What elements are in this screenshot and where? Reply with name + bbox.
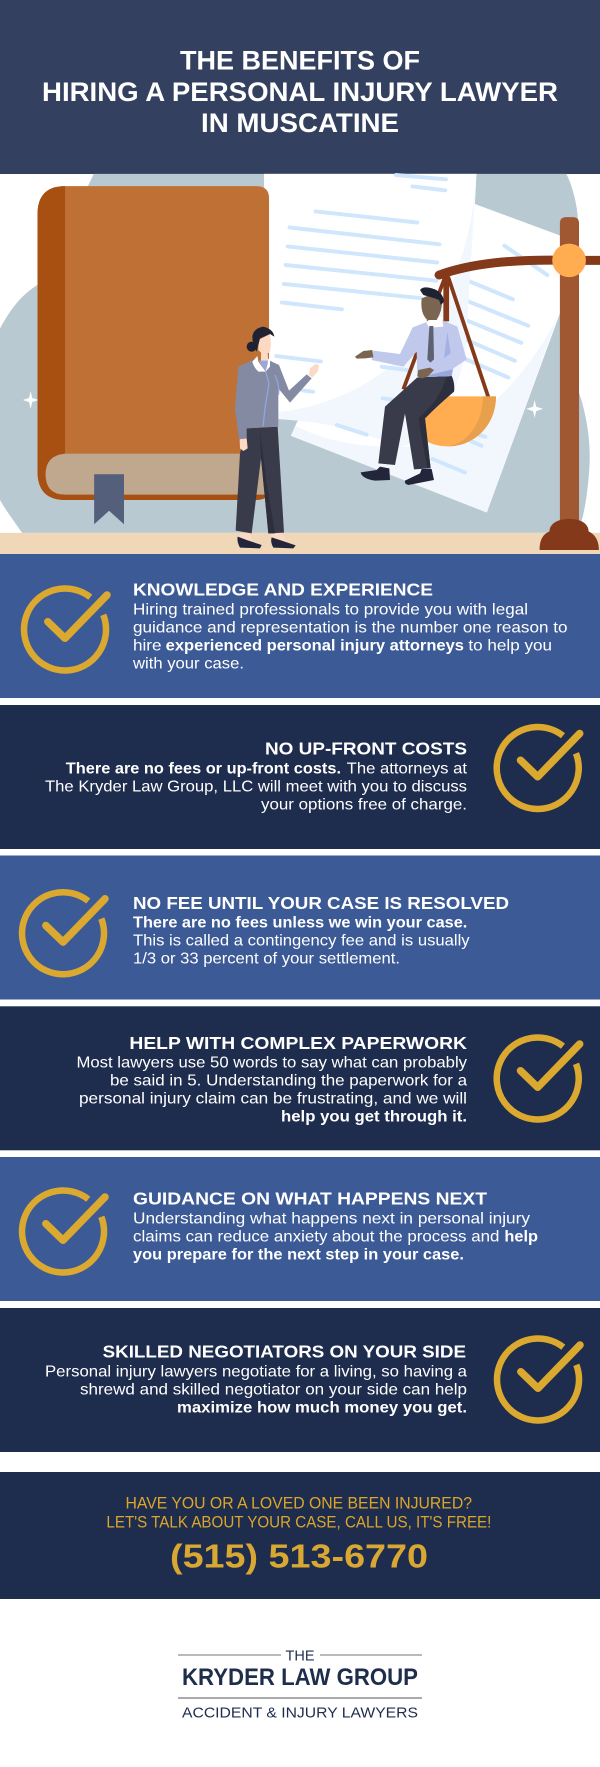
logo: The Kryder Law Group: KRYDER LAW GROUP [182, 1664, 418, 1691]
icon: gold check circle [497, 1338, 580, 1420]
icon: gold check circle [497, 727, 580, 809]
text block [76, 1054, 467, 1125]
text block: help you get through it. [281, 1108, 467, 1125]
text block: with your case. [132, 655, 244, 672]
logo: The Kryder Law Group: THE [286, 1648, 314, 1665]
text block [132, 601, 568, 672]
panel: guidance on what happens next [0, 1157, 600, 1301]
text block: This is called a contingency fee and is usually [133, 932, 470, 949]
scale pan [402, 396, 496, 446]
heading: HELP WITH COMPLEX PAPERWORK [129, 1033, 467, 1053]
panel: knowledge and experience [0, 554, 600, 698]
text block: Understanding what happens next in personal injury [133, 1210, 530, 1227]
text block: hire [133, 637, 162, 654]
book [38, 186, 269, 524]
scale strings [403, 277, 488, 397]
scale base [540, 519, 599, 550]
text block: The Kryder Law Group, LLC will meet with you to discuss [45, 778, 467, 795]
text block [133, 1210, 538, 1263]
heading: SKILLED NEGOTIATORS ON YOUR SIDE [103, 1342, 466, 1362]
man [355, 287, 467, 485]
panel: no up-front costs [0, 705, 600, 849]
text block: The attorneys at [347, 760, 468, 777]
background blob [0, 174, 590, 533]
text block: maximize how much money you get. [177, 1400, 467, 1417]
heading: KNOWLEDGE AND EXPERIENCE [133, 580, 433, 600]
title banner [0, 0, 600, 174]
phone number: (515) 513-6770 [170, 1537, 428, 1574]
text block: you prepare for the next step in your case. [133, 1246, 464, 1263]
scale pole [560, 217, 579, 525]
text block [45, 760, 468, 813]
text block: Hiring trained professionals to provide you with legal [133, 601, 528, 618]
call to action text: LET'S TALK ABOUT YOUR CASE, CALL US, IT'S FREE! [106, 1513, 491, 1532]
call to action text: HAVE YOU OR A LOVED ONE BEEN INJURED? [126, 1494, 472, 1513]
panel: no fee until resolved [0, 856, 600, 1000]
ground [0, 533, 600, 555]
text block: Personal injury lawyers negotiate for a living, so having a [45, 1364, 467, 1381]
text block: to help you [468, 637, 552, 654]
text block: claims can reduce anxiety about the process and [133, 1228, 499, 1245]
bookmark [94, 474, 124, 524]
text block: experienced personal injury attorneys [166, 637, 464, 654]
text block: be said in 5. Understanding the paperwork for a [110, 1072, 467, 1089]
text block: 1/3 or 33 percent of your settlement. [133, 950, 400, 967]
paper: front sheet [264, 174, 476, 447]
icon: gold check circle [22, 1190, 105, 1272]
text block: Most lawyers use 50 words to say what can probably [76, 1054, 467, 1071]
icon: gold check circle [22, 892, 105, 974]
text block: shrewd and skilled negotiator on your side can help [80, 1382, 467, 1399]
panel: call to action [0, 1472, 600, 1599]
call to action text [106, 1494, 491, 1532]
text block: personal injury claim can be frustrating, and we will [79, 1090, 467, 1107]
panel: skilled negotiators [0, 1308, 600, 1452]
title [42, 46, 558, 138]
heading: GUIDANCE ON WHAT HAPPENS NEXT [133, 1189, 487, 1209]
logo: The Kryder Law Group [178, 1648, 422, 1721]
text block [45, 1364, 467, 1417]
icon: gold check circle [497, 1037, 580, 1119]
paper: back sheet [291, 204, 561, 512]
panel: hero illustration [0, 174, 600, 555]
title: HIRING A PERSONAL INJURY LAWYER [42, 77, 558, 107]
text block: your options free of charge. [261, 796, 467, 813]
text block: help [504, 1228, 538, 1245]
text block: guidance and representation is the number one reason to [133, 619, 568, 636]
panel: help with paperwork [0, 1006, 600, 1150]
icon: gold check circle [24, 588, 107, 670]
title: THE BENEFITS OF [180, 46, 420, 76]
text block: There are no fees or up-front costs. [66, 760, 341, 777]
logo: The Kryder Law Group: ACCIDENT & INJURY LAWYERS [182, 1704, 418, 1721]
sparkles [23, 391, 543, 418]
title: IN MUSCATINE [201, 108, 399, 138]
heading: NO FEE UNTIL YOUR CASE IS RESOLVED [133, 893, 509, 913]
scale knob [552, 244, 586, 277]
text block [133, 914, 470, 967]
heading: NO UP-FRONT COSTS [265, 739, 467, 759]
text block: There are no fees unless we win your case. [133, 914, 467, 931]
woman [235, 327, 319, 548]
scale beam [439, 260, 600, 275]
